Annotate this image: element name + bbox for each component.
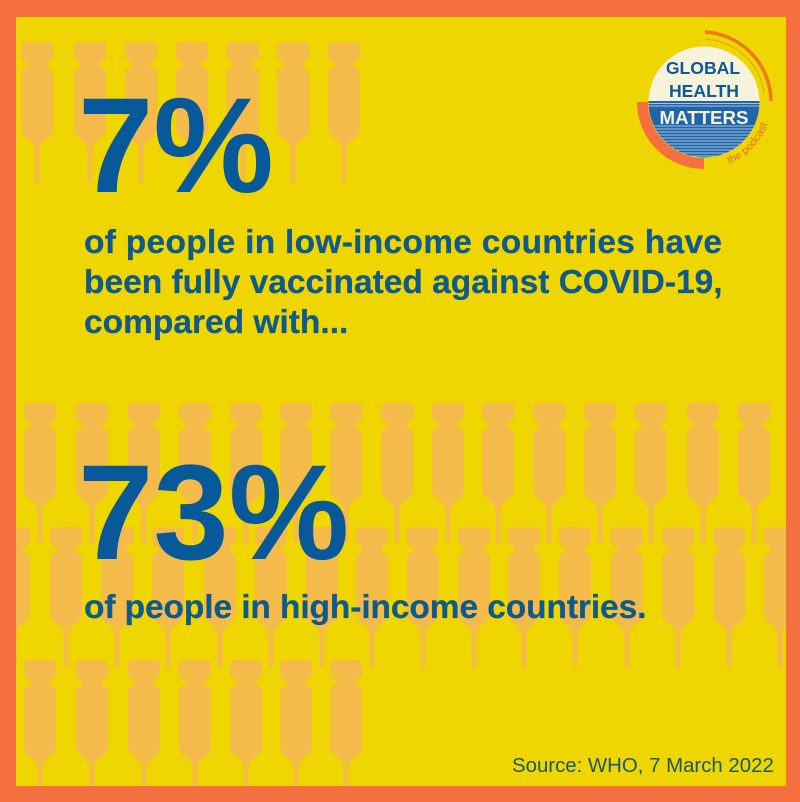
text: low-income statement: of people in low-income countries have <box>84 224 722 261</box>
logo wordmark <box>660 58 748 128</box>
logo wordmark: GLOBAL <box>666 58 740 78</box>
logo: Global Health Matters podcast <box>637 30 773 169</box>
text: low-income statement: been fully vaccinated against COVID-19, <box>84 264 723 301</box>
text: high-income statement: of people in high-income countries. <box>84 589 646 626</box>
text: low-income statement <box>84 224 723 341</box>
logo arcs <box>642 32 771 164</box>
logo tagline: the podcast <box>726 122 768 164</box>
source note: Source: WHO, 7 March 2022 <box>512 755 774 777</box>
logo wordmark: HEALTH <box>669 81 739 101</box>
logo circle <box>645 46 763 161</box>
logo wordmark: MATTERS <box>660 107 748 128</box>
big stat: 73%: 73% <box>78 436 349 588</box>
text: low-income statement: compared with... <box>84 304 348 341</box>
big stat: 7%: 7% <box>78 69 274 221</box>
